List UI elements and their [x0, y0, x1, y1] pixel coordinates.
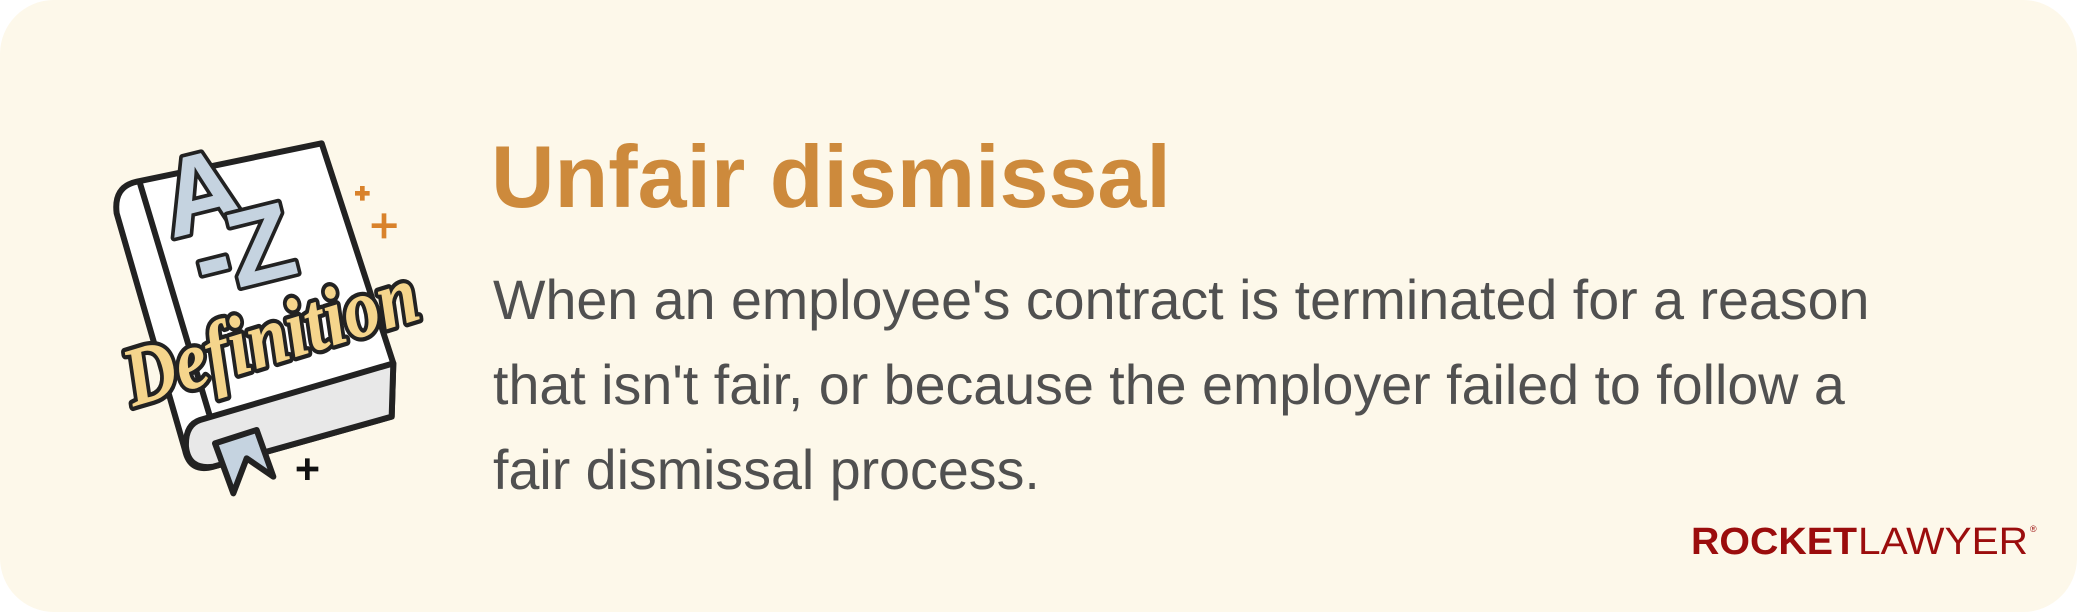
icon: A-Z definition book [111, 130, 429, 496]
text block: definition: When an employee's contract is terminated for a reason [493, 269, 1869, 331]
text block: definition: fair dismissal process. [493, 439, 1040, 501]
text block: definition: that isn't fair, or because the employer failed to follow a [493, 354, 1845, 416]
title: Unfair dismissal [491, 127, 1171, 226]
logo: Rocket Lawyer [1691, 521, 2037, 560]
icon: A-Z definition book: -Z [180, 178, 307, 319]
logo: Rocket Lawyer: ® [2030, 524, 2037, 534]
text block: definition [493, 269, 1869, 501]
